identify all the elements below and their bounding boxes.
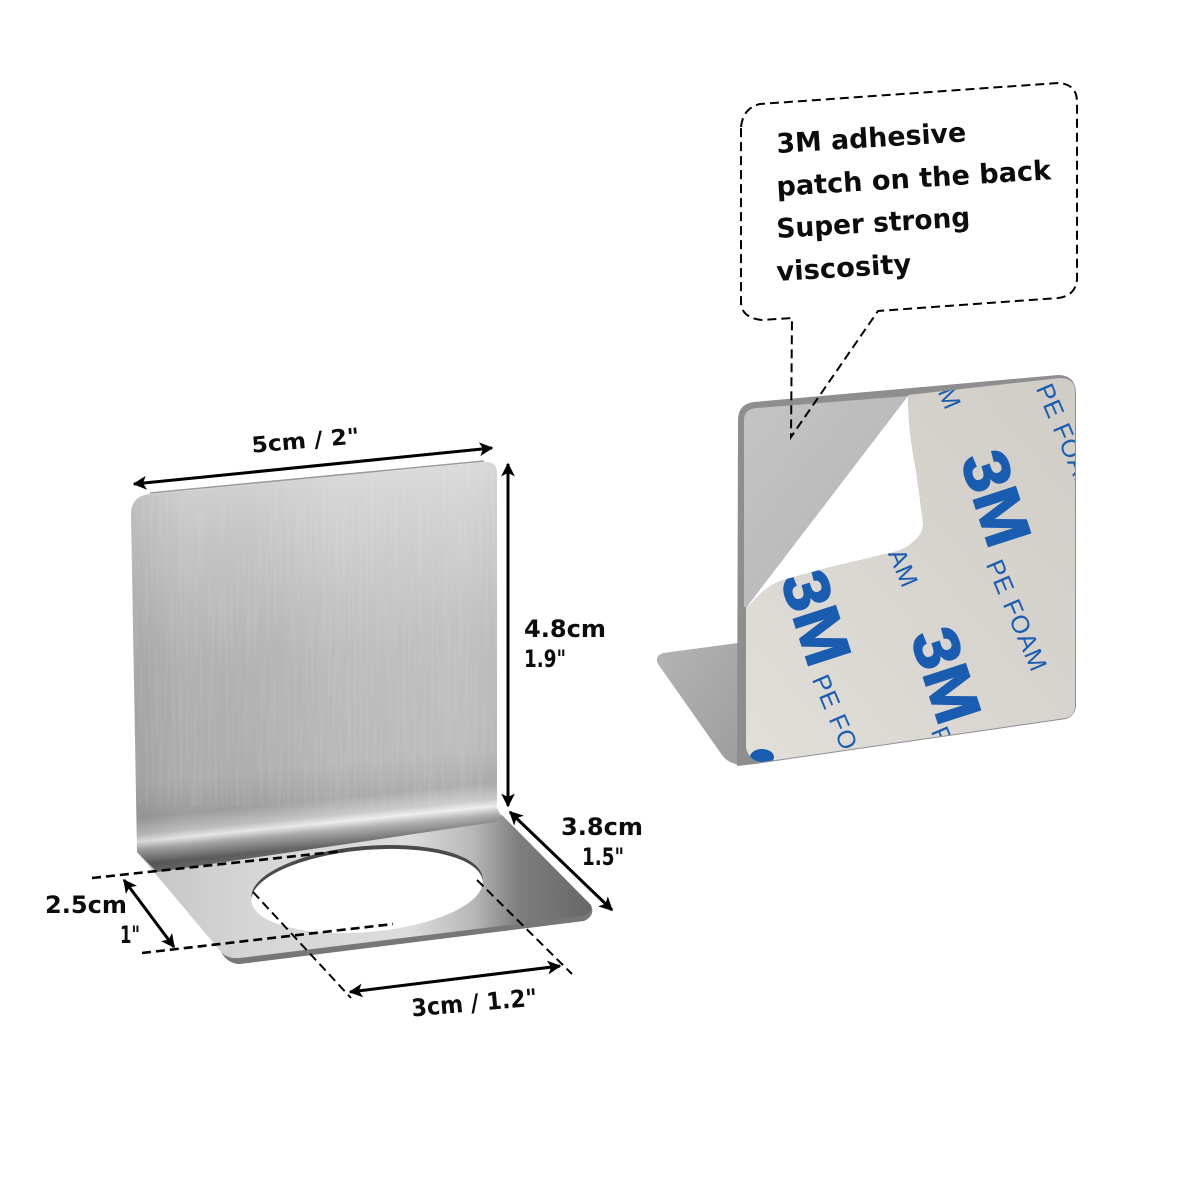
dimension: width 5cm <box>134 424 492 484</box>
brushed texture <box>200 802 238 806</box>
label fold: PE FOAM <box>851 472 923 591</box>
round hole rim <box>248 836 486 940</box>
metal plate edge <box>737 375 1076 766</box>
callout text: Super strong <box>776 202 971 245</box>
label left: PE FOAM <box>806 671 878 790</box>
label inches: 1" <box>120 921 140 949</box>
label top middle: PE FOAM <box>894 294 966 413</box>
base plate seen from behind <box>657 643 738 765</box>
label top: PE FOAM <box>980 556 1052 675</box>
bracket base front edge <box>221 908 592 964</box>
bracket back plate <box>131 462 502 872</box>
logo top: 3M <box>947 442 1045 555</box>
label top right: PE FOAM <box>1030 380 1102 499</box>
label: 3.8cm <box>561 813 643 841</box>
top edge <box>150 461 484 493</box>
callout text: patch on the back <box>776 155 1053 203</box>
right product: bracket back with 3M adhesive <box>656 375 1076 766</box>
round hole <box>248 840 486 942</box>
callout: 3M adhesive <box>741 83 1077 437</box>
plate sheen <box>131 492 495 861</box>
dimension: depth 3.8cm <box>510 812 643 910</box>
label middle: PE FOAM <box>925 723 997 842</box>
blue 3M printing <box>750 383 1075 762</box>
callout text: 3M adhesive <box>776 117 967 160</box>
label: 5cm / 2" <box>251 424 360 459</box>
label: 2.5cm <box>45 891 127 919</box>
label inches: 1.5" <box>582 843 624 871</box>
bracket base plate <box>137 815 592 958</box>
peeled white fold <box>746 396 923 608</box>
dimension: 2.5cm <box>45 851 393 953</box>
3M foam backing <box>746 378 1075 762</box>
label inches: 1.9" <box>524 645 566 673</box>
logo bottom corner <box>750 749 774 762</box>
left product: stainless bracket front view <box>131 461 592 964</box>
logo middle: 3M <box>897 619 995 732</box>
callout text <box>776 117 1053 288</box>
exposed metal face <box>744 396 908 607</box>
callout text: viscosity <box>776 249 913 288</box>
label: 3cm / 1.2" <box>410 984 538 1022</box>
logo left: 3M <box>767 561 865 674</box>
dimension: height 4.8cm <box>508 464 606 806</box>
dimension: 3cm hole <box>253 880 572 1022</box>
label: 4.8cm <box>524 615 606 643</box>
